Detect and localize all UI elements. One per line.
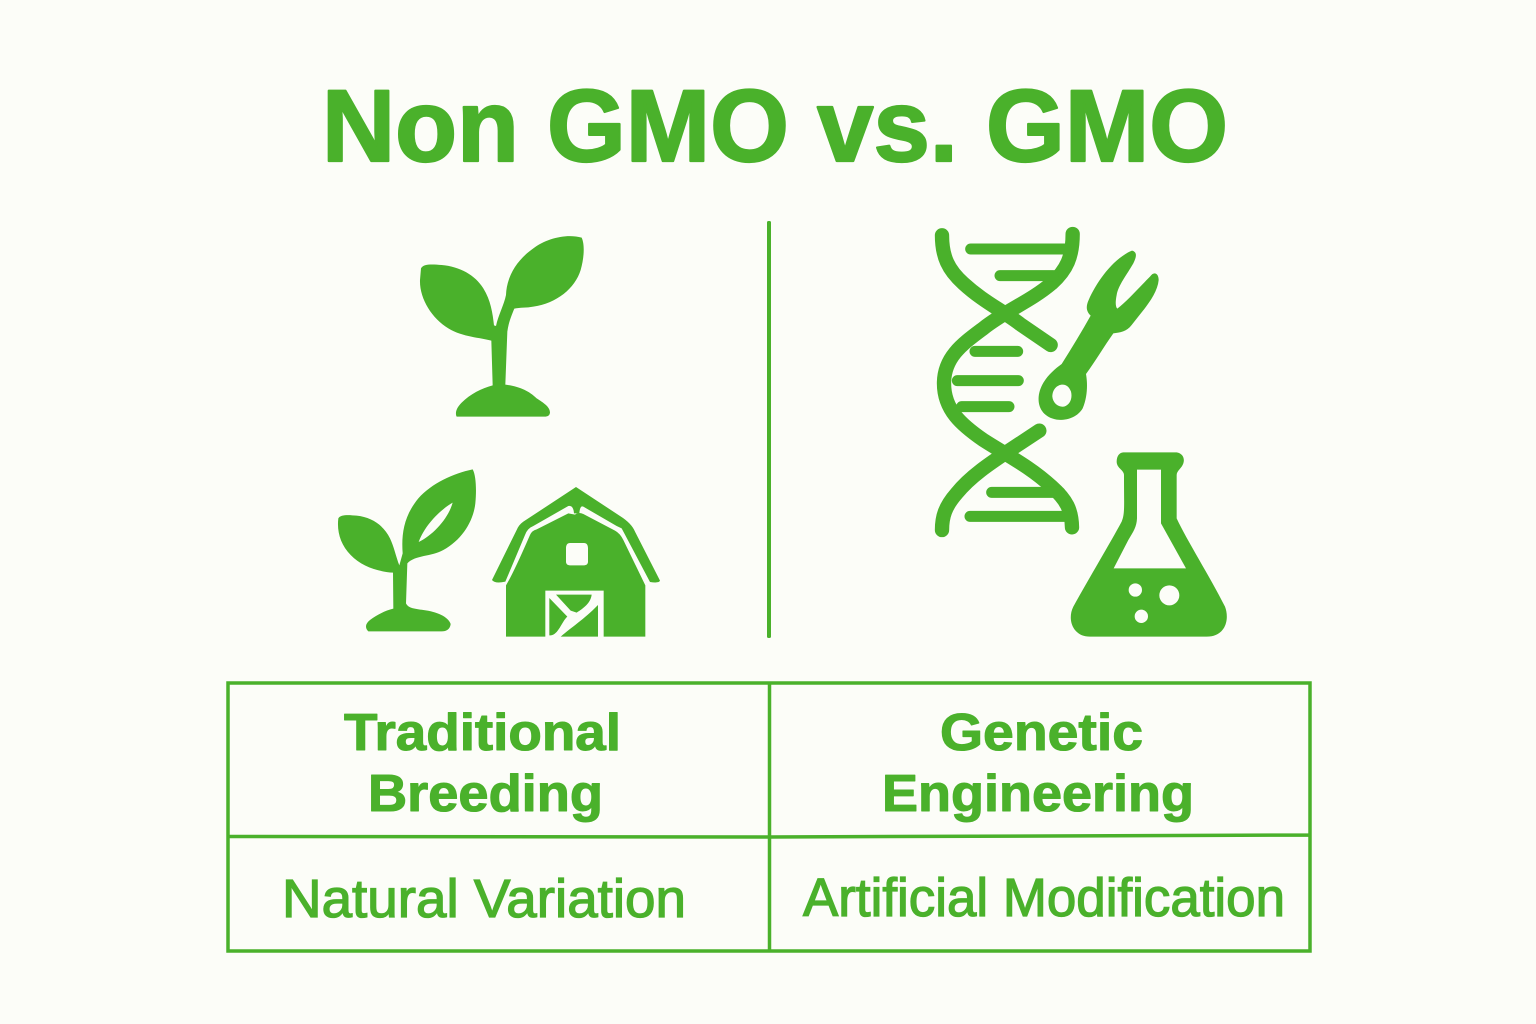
icon: small sprout with veined leaf (338, 469, 476, 631)
cell: Genetic Engineering: Engineering (882, 765, 1194, 823)
title: Non GMO vs. GMO (322, 69, 1228, 183)
icon: sprout on mound (420, 236, 584, 417)
icon: barn (492, 487, 660, 637)
cell: Traditional Breeding (344, 704, 621, 823)
helix rungs (957, 249, 1067, 516)
cell: Traditional Breeding: Traditional (344, 704, 621, 762)
cell: Traditional Breeding: Breeding (368, 765, 603, 823)
comparison table (228, 683, 1310, 951)
icon: flask (1071, 452, 1227, 637)
cell: Natural Variation: Natural Variation (282, 869, 686, 929)
helix strands (942, 235, 1051, 345)
cell: Artificial Modification: Artificial Modification (803, 868, 1285, 928)
barn roof (492, 487, 660, 583)
table grid (228, 683, 1310, 951)
centre divider (767, 221, 771, 638)
barn door (549, 595, 598, 637)
barn body (506, 513, 645, 637)
icon: DNA helix (942, 234, 1073, 530)
cell: Genetic Engineering: Genetic (940, 704, 1143, 762)
icon: wrench (1039, 251, 1159, 420)
cell: Genetic Engineering (882, 704, 1194, 823)
